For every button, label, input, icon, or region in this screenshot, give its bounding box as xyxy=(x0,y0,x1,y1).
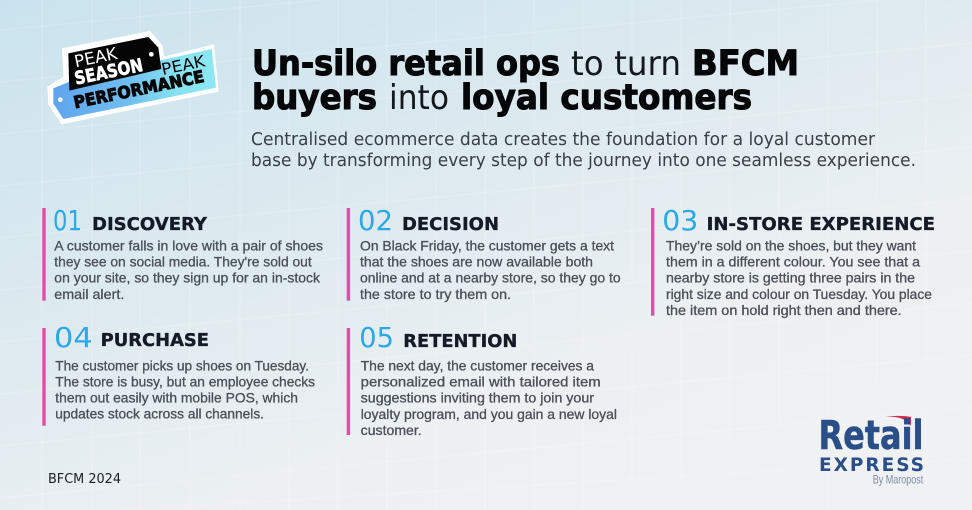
icon: red swoosh xyxy=(884,416,911,426)
panel: 01 discovery: DISCOVERY xyxy=(92,215,207,235)
panel: 04 purchase: 04 xyxy=(54,321,93,354)
logo: Peak Season Peak Performance tags: PERFORMANCE xyxy=(72,67,206,112)
panel: 02 decision: the store to try them on. xyxy=(360,286,511,302)
panel: 01 discovery: they see on social media. They're sold out xyxy=(54,254,312,270)
logo: Retail Express by Maropost: By Maropost xyxy=(873,472,924,486)
logo: Peak Season Peak Performance tags: PEAK xyxy=(160,51,207,79)
panel: 02 decision: On Black Friday, the customer gets a text xyxy=(360,238,614,254)
panel: 03 in-store experience: right size and colour on Tuesday. You place xyxy=(666,286,932,302)
logo: Retail Express by Maropost xyxy=(818,413,924,486)
panel: 02 decision: DECISION xyxy=(402,215,499,235)
panel: 02 decision: that the shoes are now available both xyxy=(360,254,593,270)
title: buyers xyxy=(252,78,377,118)
panel: 05 retention: 05 xyxy=(359,321,394,354)
panel: 03 in-store experience: the item on hold right then and there. xyxy=(666,302,902,318)
panel: 03 in-store experience xyxy=(651,204,935,318)
panel: 05 retention: personalized email with tailored item xyxy=(361,374,601,390)
panel: 02 decision xyxy=(347,204,621,302)
panel: 03 in-store experience: They’re sold on the shoes, but they want xyxy=(666,238,916,254)
panel: 03 in-store experience: nearby store is getting three pairs in the xyxy=(666,270,915,286)
logo: Peak Season Peak Performance tags: PEAK xyxy=(73,44,120,71)
subtitle: base by transforming every step of the journey into one seamless experience. xyxy=(251,150,916,171)
panel: 01 discovery: 01 xyxy=(53,204,82,237)
panel: 05 retention: RETENTION xyxy=(403,332,517,352)
panel: 05 retention: loyalty program, and you gain a new loyal xyxy=(361,406,617,422)
panel: 02 decision: online and at a nearby store, so they go to xyxy=(360,270,621,286)
logo: Retail Express by Maropost: Retail xyxy=(818,413,924,459)
panel: 03 in-store experience: them in a different colour. You see that a xyxy=(666,254,920,270)
panel: 04 purchase: them out easily with mobile POS, which xyxy=(55,390,298,406)
title: into xyxy=(389,78,449,118)
panel: 05 retention: suggestions inviting them to join your xyxy=(361,390,594,406)
panel: 05 retention: customer. xyxy=(361,422,422,438)
logo: Peak Season Peak Performance tags: SEASON xyxy=(73,55,145,90)
title: BFCM xyxy=(692,44,799,84)
title xyxy=(252,44,799,118)
panel: 05 retention xyxy=(347,321,617,438)
panel: 04 purchase: The customer picks up shoes on Tuesday. xyxy=(55,358,309,374)
panel: 01 discovery xyxy=(42,204,323,302)
logo: Peak Season Peak Performance tags xyxy=(47,31,219,124)
title: Un-silo retail ops xyxy=(252,44,560,84)
subtitle: Centralised ecommerce data creates the foundation for a loyal customer xyxy=(251,129,876,150)
panel: 05 retention: The next day, the customer receives a xyxy=(361,358,594,374)
panel: 01 discovery: on your site, so they sign up for an in-stock xyxy=(54,270,321,286)
panel: 03 in-store experience: 03 xyxy=(662,204,698,237)
panel: 03 in-store experience: IN-STORE EXPERIENCE xyxy=(707,215,935,235)
panel: 04 purchase: The store is busy, but an employee checks xyxy=(55,374,315,390)
title: to turn xyxy=(571,44,681,84)
panel: 04 purchase: PURCHASE xyxy=(101,331,209,351)
panel: 02 decision: 02 xyxy=(358,204,393,237)
panel: 01 discovery: A customer falls in love with a pair of shoes xyxy=(54,238,323,254)
panel: 04 purchase xyxy=(42,321,315,426)
panel: 01 discovery: email alert. xyxy=(54,286,124,302)
logo: Retail Express by Maropost: EXPRESS xyxy=(819,455,924,476)
subtitle xyxy=(251,129,916,171)
panel: 04 purchase: updates stock across all channels. xyxy=(55,406,264,422)
title: loyal customers xyxy=(461,78,752,118)
footer label: BFCM 2024 xyxy=(48,471,121,487)
